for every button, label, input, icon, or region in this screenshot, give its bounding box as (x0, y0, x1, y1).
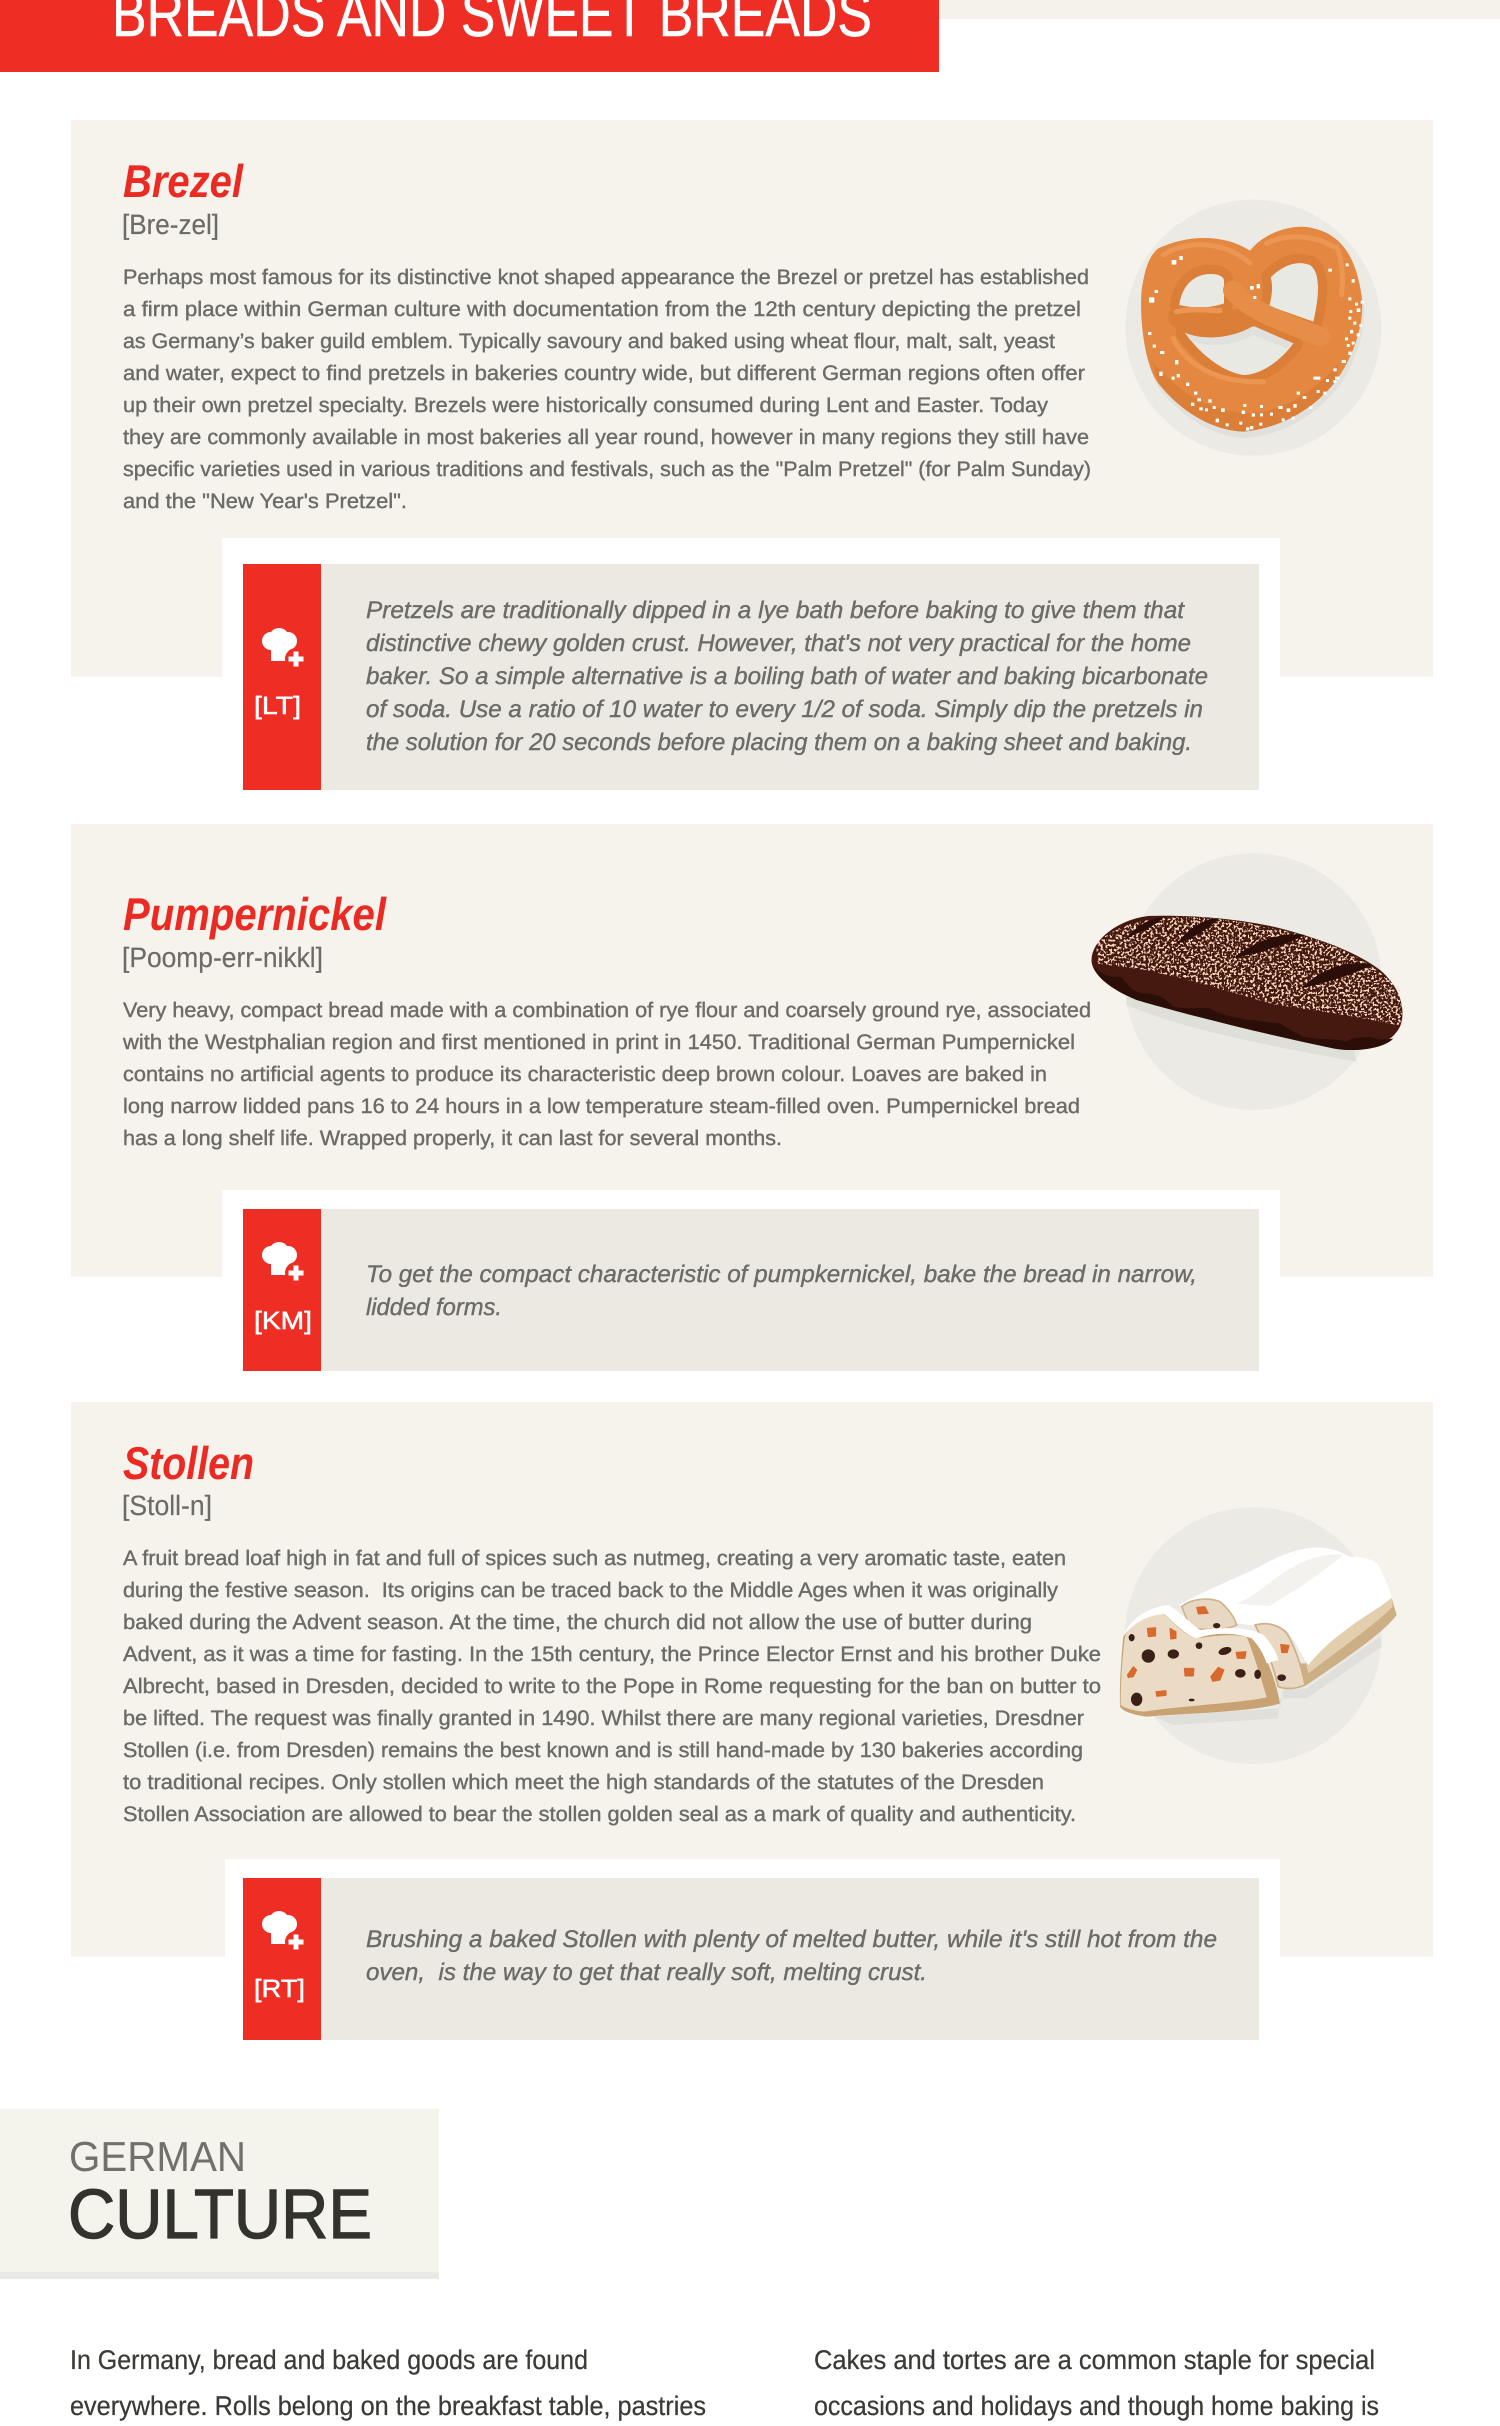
author tab: LT (243, 564, 321, 790)
body text: Stollen: Albrecht, based in Dresden, decided to write to the Pope in Rome requesting for the ban on butter to (123, 1675, 1101, 1698)
body text: Stollen: to traditional recipes. Only stollen which meet the high standards of the statutes of the Dresden (123, 1771, 1044, 1794)
body text: Stollen: Stollen Association are allowed to bear the stollen golden seal as a mark of quality and authenticity. (123, 1803, 1076, 1826)
callout: Pumpernickel tip (222, 1190, 1280, 1371)
label: KM: [KM] (254, 1307, 312, 1335)
body text: Stollen: baked during the Advent season. At the time, the church did not allow the use of butter during (123, 1611, 1032, 1634)
body text: Stollen (123, 1547, 1101, 1826)
body text: Pumpernickel: contains no artificial agents to produce its characteristic deep brown colour. Loaves are baked in (123, 1063, 1047, 1086)
text column: right: occasions and holidays and though home baking is (814, 2391, 1379, 2421)
callout: Stollen tip (225, 1859, 1280, 2040)
text column: right (814, 2345, 1379, 2421)
body text: Pumpernickel: with the Westphalian region and first mentioned in print in 1450. Traditional German Pumpernickel (122, 1031, 1075, 1054)
pronunciation: Brezel: [Bre-zel] (122, 209, 219, 240)
body text: Stollen: Stollen (i.e. from Dresden) remains the best known and is still hand-made by 130 bakeries according (123, 1739, 1083, 1762)
label: RT: [RT] (254, 1975, 305, 2003)
rear loaf (1178, 1547, 1353, 1630)
panel: Pumpernickel (71, 824, 1433, 1277)
body text: Stollen: be lifted. The request was finally granted in 1490. Whilst there are many regional varieties, Dresdner (123, 1707, 1084, 1730)
body text: Brezel: they are commonly available in most bakeries all year round, however in many regions they still have (123, 426, 1089, 449)
tip text: Brezel: baker. So a simple alternative is a boiling bath of water and baking bicarbonate (366, 663, 1208, 690)
heading line: Culture: CULTURE (68, 2175, 372, 2253)
heading line: German: GERMAN (69, 2133, 246, 2180)
body text: Stollen: A fruit bread loaf high in fat and full of spices such as nutmeg, creating a very aromatic taste, eaten (123, 1547, 1066, 1570)
loaf (1277, 1598, 1397, 1689)
pronunciation: Pumpernickel: [Poomp-err-nikkl] (122, 942, 323, 973)
text column: left (70, 2345, 706, 2421)
tip text: Stollen (366, 1926, 1217, 1986)
body text: Pumpernickel: Very heavy, compact bread made with a combination of rye flour and coarsely ground rye, associated (123, 999, 1091, 1022)
text column: right: Cakes and tortes are a common staple for special (814, 2345, 1375, 2375)
pronunciation: Stollen: [Stoll-n] (122, 1490, 212, 1521)
callout: Brezel tip (222, 538, 1280, 790)
tip text: Stollen: Brushing a baked Stollen with plenty of melted butter, while it's still hot from the (366, 1926, 1217, 1953)
header banner (0, 0, 939, 72)
text column: left: everywhere. Rolls belong on the breakfast table, pastries (70, 2391, 706, 2421)
body text: Brezel: and water, expect to find pretzels in bakeries country wide, but different German regions often offer (123, 362, 1085, 385)
fruits (1127, 1607, 1289, 1696)
heading: Brezel: Brezel (123, 155, 244, 207)
icon: chef hat plus (262, 1911, 307, 1953)
heading: Pumpernickel: Pumpernickel (123, 888, 387, 940)
tip text: Brezel: of soda. Use a ratio of 10 water to every 1/2 of soda. Simply dip the pretzels in (366, 696, 1203, 723)
body text: Brezel: a firm place within German culture with documentation from the 12th century depicting the pretzel (123, 298, 1081, 321)
tip text: Pumpernickel: To get the compact characteristic of pumpkernickel, bake the bread in narrow, (366, 1261, 1197, 1288)
icon: stollen illustration (1120, 1507, 1397, 1764)
body text: Brezel: specific varieties used in various traditions and festivals, such as the "Palm Pretzel" (for Palm Sunday) (123, 458, 1091, 481)
front slice (1120, 1612, 1280, 1717)
tip text: Pumpernickel (366, 1261, 1197, 1321)
top right band (939, 0, 1500, 19)
icon: chef hat plus (262, 1242, 307, 1284)
tip text: Pumpernickel: lidded forms. (366, 1294, 502, 1321)
tip text: Brezel: the solution for 20 seconds before placing them on a baking sheet and baking. (366, 729, 1192, 756)
panel: Stollen (71, 1402, 1433, 1957)
body text: Brezel (123, 266, 1091, 513)
panel: Brezel (71, 120, 1433, 677)
body text: Pumpernickel: long narrow lidded pans 16 to 24 hours in a low temperature steam-filled oven. Pumpernickel bread (123, 1095, 1080, 1118)
author tab: KM (243, 1209, 321, 1371)
icon: chef hat plus (262, 628, 307, 670)
tip text: Brezel: Pretzels are traditionally dipped in a lye bath before baking to give them that (366, 597, 1185, 624)
tip text: Brezel (366, 597, 1208, 756)
body text: Brezel: Perhaps most famous for its distinctive knot shaped appearance the Brezel or pretzel has established (123, 266, 1089, 289)
body text: Pumpernickel (122, 999, 1091, 1150)
text column: left: In Germany, bread and baked goods are found (70, 2345, 588, 2375)
tip text: Stollen: oven, is the way to get that really soft, melting crust. (366, 1959, 927, 1986)
heading: Stollen: Stollen (123, 1437, 254, 1489)
body text: Stollen: during the festive season. Its origins can be traced back to the Middle Ages when it was originally (123, 1579, 1059, 1602)
body text: Brezel: up their own pretzel specialty. Brezels were historically consumed during Lent and Easter. Today (123, 394, 1049, 417)
body text: Brezel: as Germany’s baker guild emblem. Typically savoury and baked using wheat flour, malt, salt, yeast (123, 330, 1055, 353)
label: LT: [LT] (254, 692, 301, 720)
icon: pumpernickel loaf illustration (1092, 853, 1403, 1110)
tip text: Brezel: distinctive chewy golden crust. However, that's not very practical for the home (366, 630, 1191, 657)
body text: Stollen: Advent, as it was a time for fasting. In the 15th century, the Prince Elector Ernst and his brother Duke (123, 1643, 1101, 1666)
body text: Pumpernickel: has a long shelf life. Wrapped properly, it can last for several months. (123, 1127, 782, 1150)
body text: Brezel: and the "New Year's Pretzel". (123, 490, 407, 513)
author tab: RT (243, 1878, 321, 2040)
icon: pretzel illustration (1125, 200, 1381, 456)
section heading: German Culture (0, 2109, 439, 2279)
